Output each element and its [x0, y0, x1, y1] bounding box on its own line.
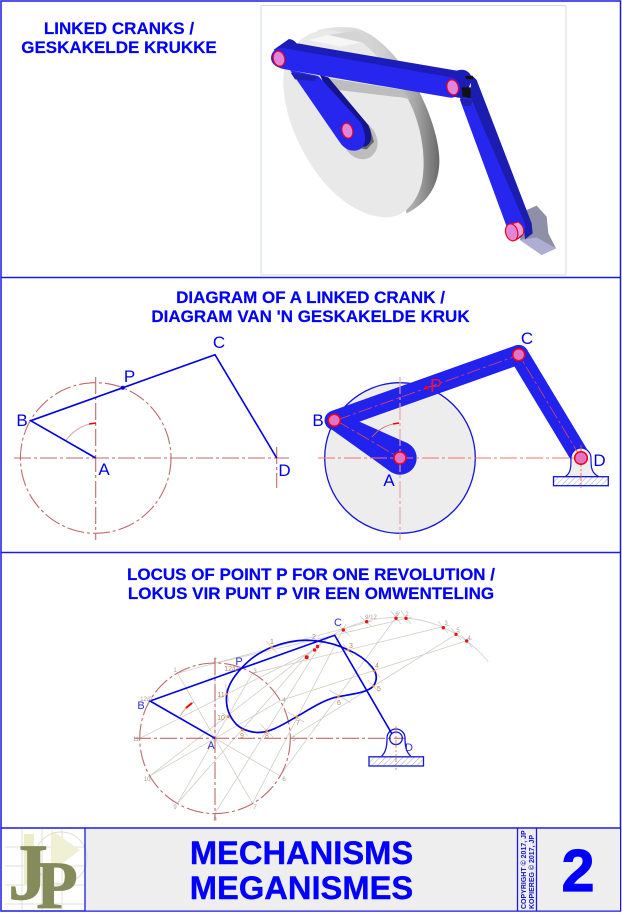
labels: C: [521, 329, 533, 348]
locus numbers: 11: [217, 692, 225, 699]
pins: [328, 349, 587, 464]
footer title: [190, 834, 413, 906]
circle numbers: 6: [282, 777, 286, 783]
locus numbers: 2: [312, 634, 316, 641]
locus diagram: [133, 611, 488, 823]
pins: [272, 50, 524, 242]
logo: [5, 829, 87, 915]
title: locus: [127, 565, 495, 603]
title: linked cranks: GESKAKELDE KRUKKE: [21, 38, 217, 57]
support D: [369, 726, 424, 770]
footer: [5, 828, 620, 915]
circle numbers: 5: [456, 628, 460, 634]
labels: A: [383, 471, 395, 490]
C position dots: [305, 617, 468, 659]
construction lines: [140, 611, 488, 813]
labels: C: [213, 333, 225, 352]
labels: B: [312, 411, 324, 430]
circle numbers: 6: [395, 612, 399, 618]
point labels: D: [405, 742, 413, 754]
locus numbers: 6: [337, 700, 341, 707]
locus point marks: [225, 646, 375, 732]
copyright: [520, 830, 536, 909]
locus numbers: [217, 634, 381, 740]
footer title: MEGANISMES: [190, 869, 413, 906]
point labels: A: [207, 740, 215, 752]
icon: disc wheel: [283, 27, 439, 217]
locus numbers: 7: [296, 720, 300, 727]
point labels: C: [334, 617, 342, 629]
locus numbers: 9: [240, 733, 244, 740]
locus numbers: 1: [270, 639, 274, 646]
locus arc ticks: [222, 611, 472, 737]
title: diagram: DIAGRAM OF A LINKED CRANK /: [176, 288, 445, 307]
panel: 3D linked crank rendering: [261, 6, 566, 275]
circle numbers: 4: [467, 636, 471, 642]
labels: D: [278, 461, 291, 480]
diagram: line skeleton: [14, 333, 291, 540]
circle numbers: 7: [253, 805, 257, 811]
divider 2: [1, 552, 621, 554]
linkage: [150, 635, 392, 738]
circle numbers: 8: [213, 817, 217, 823]
labels: [16, 333, 291, 480]
point labels: B: [137, 700, 145, 712]
circle numbers: 11: [133, 737, 140, 743]
title: linked cranks: LINKED CRANKS /: [44, 19, 194, 38]
circle numbers: 3: [253, 669, 257, 675]
diagram: solid linked crank: [312, 329, 608, 540]
copyright: KOPIEREG © 2017, JP: [528, 835, 536, 909]
title: locus: LOKUS VIR PUNT P VIR EEN OMWENTELING: [128, 584, 494, 603]
title: linked cranks: [21, 19, 217, 57]
locus curve: [226, 640, 376, 733]
links: [330, 355, 581, 475]
icon: connecting rod D: [460, 75, 556, 255]
point P: [121, 386, 125, 390]
disc: [325, 383, 475, 533]
circle numbers: 2: [405, 612, 409, 618]
circle numbers: 2: [213, 658, 217, 664]
icon: crank link: [290, 70, 371, 151]
title: locus: LOCUS OF POINT P FOR ONE REVOLUTION /: [127, 565, 495, 584]
icon: coupler link: [271, 39, 473, 98]
centre lines and circle: [134, 658, 405, 820]
circle numbers: 12/0: [140, 697, 152, 703]
labels: P: [124, 367, 135, 386]
circle numbers: 9/12: [365, 615, 377, 621]
divider 3: [1, 827, 621, 829]
linkage lines: [31, 355, 277, 458]
centre lines: [318, 355, 588, 540]
title: diagram: [151, 288, 470, 326]
circle numbers: 5: [292, 737, 296, 743]
circle numbers: 9: [173, 805, 177, 811]
point labels: P: [235, 656, 243, 668]
locus numbers: 10: [217, 715, 225, 722]
support and base: [554, 448, 608, 486]
crank direction arrow: [180, 702, 194, 716]
point labels: [137, 617, 413, 754]
locus numbers: 12/0: [224, 666, 238, 673]
circle numbers: 3: [444, 621, 448, 627]
locus numbers: 8: [265, 733, 269, 740]
circle numbers: [133, 612, 471, 823]
circle numbers: 4: [282, 698, 286, 704]
labels: B: [16, 411, 28, 430]
labels: D: [593, 451, 606, 470]
pin A: [340, 122, 354, 139]
labels: A: [98, 460, 110, 479]
divider 1: [1, 276, 621, 278]
circle numbers: 1: [173, 668, 177, 674]
point P: [425, 386, 429, 390]
locus numbers: 5: [377, 686, 381, 693]
locus numbers: 3: [349, 643, 353, 650]
footer background: [85, 829, 620, 910]
logo: J: [8, 829, 48, 915]
locus numbers: 4: [375, 663, 379, 670]
labels: P: [430, 376, 442, 396]
footer title: MECHANISMS: [190, 834, 413, 871]
labels: [312, 329, 606, 490]
circle numbers: 10: [144, 777, 151, 783]
copyright: COPYRIGHT © 2017, JP: [520, 830, 528, 909]
page number: 2: [562, 838, 594, 904]
centre lines and circle: [14, 377, 289, 540]
footer dividers: [85, 828, 536, 911]
title: diagram: DIAGRAM VAN 'N GESKAKELDE KRUK: [151, 307, 470, 326]
